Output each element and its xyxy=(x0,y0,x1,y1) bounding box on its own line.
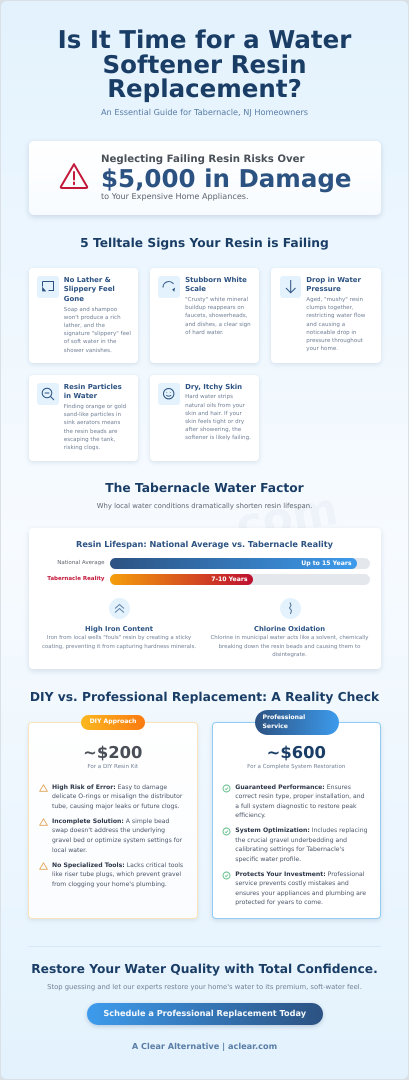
button: schedule xyxy=(87,1003,322,1024)
title: Is It Time for a Water xyxy=(58,25,351,54)
sign text: Pressure xyxy=(306,285,341,293)
sign text: noticeable drop in xyxy=(306,330,356,336)
icon: refresh arc xyxy=(158,276,180,298)
sign text: No Lather & xyxy=(64,276,111,284)
DIY price note: For a DIY Resin Kit xyxy=(87,764,138,770)
chlorine heading: Chlorine Oxidation xyxy=(254,625,325,633)
icon: magnifier xyxy=(37,383,58,404)
sign text: Dry, Itchy Skin xyxy=(185,383,242,391)
panel: sign 2 xyxy=(150,268,259,363)
iron text: Iron from local wells "fouls" resin by creating a sticky xyxy=(47,635,191,641)
iron text xyxy=(42,634,196,650)
sign text xyxy=(306,276,365,352)
pro benefit 2: specific water profile. xyxy=(235,856,301,863)
badge: DIY approach xyxy=(81,715,145,730)
pro benefit 1 xyxy=(222,784,365,819)
sign text: faucets, showerheads, xyxy=(185,313,247,319)
sign text: shower vanishes. xyxy=(64,348,112,354)
heading: signs: 5 Telltale Signs Your Resin is Failing xyxy=(80,236,329,250)
alert note: to Your Expensive Home Appliances. xyxy=(101,191,249,201)
footer heading: Restore Your Water Quality with Total Confidence. xyxy=(31,962,378,976)
icon: chlorine bolt xyxy=(280,598,301,619)
iron heading: High Iron Content xyxy=(85,625,153,633)
panel: professional xyxy=(212,722,381,919)
sign text: pressure throughout xyxy=(306,338,363,344)
panel: sign 1 xyxy=(28,268,138,363)
DIY risk 3: No Specialized Tools: Lacks critical tools xyxy=(52,862,183,869)
DIY risk 2 xyxy=(39,818,182,854)
factor: iron xyxy=(42,598,196,650)
pro benefit 1: efficiency. xyxy=(235,812,266,819)
iron text: coating, preventing it from capturing hardness minerals. xyxy=(42,644,196,650)
sign text: Hard water strips xyxy=(185,394,233,400)
panel: sign 3 xyxy=(271,268,380,363)
sign text xyxy=(64,383,126,451)
pro benefit 3: ensures your appliances and plumbing are xyxy=(235,890,366,897)
sign text xyxy=(185,383,251,441)
bar chart: lifespan xyxy=(47,558,370,585)
divider xyxy=(28,946,381,947)
title xyxy=(58,25,352,103)
sign text: skin feels tight or dry xyxy=(185,419,244,425)
panel: DIY xyxy=(28,722,198,919)
DIY risk 1 xyxy=(39,784,182,810)
pro benefit 3: protected for years to come. xyxy=(235,899,323,906)
DIY risk 3: from clogging your home's plumbing. xyxy=(52,881,167,888)
DIY risk 1: delicate O-rings or misalign the distributor xyxy=(52,793,182,800)
pro benefit 2: calibrating settings for Tabernacle's xyxy=(235,846,344,853)
footer brand: A Clear Alternative | aclear.com xyxy=(132,1041,277,1051)
DIY risk 3: like riser tube plugs, which prevent gravel xyxy=(52,871,181,878)
label: national average: National Average xyxy=(57,560,104,566)
sign text: skin and hair. If your xyxy=(185,411,242,417)
DIY risk 2: swap doesn't address the underlying xyxy=(52,827,165,834)
sign text: sink aerators means xyxy=(64,420,120,426)
label: tabernacle reality: Tabernacle Reality xyxy=(47,576,104,582)
sign text: of hard water. xyxy=(185,330,224,336)
pro benefit 2: System Optimization: Includes replacing xyxy=(235,827,368,834)
pro benefit 2: the crucial gravel underbedding and xyxy=(235,837,347,844)
chlorine text: disintegrate. xyxy=(272,652,307,658)
title: Replacement? xyxy=(107,74,302,103)
sign text: won't produce a rich xyxy=(64,315,121,321)
chlorine text: Chlorine in municipal water acts like a solvent, chemically xyxy=(210,635,369,641)
bar: tabernacle reality: 7-10 Years xyxy=(211,576,248,583)
pro benefit 1: correct resin type, proper installation, and xyxy=(235,793,365,800)
chlorine text: breaking down the resin beads and causing them to xyxy=(219,644,360,650)
sign text: Drop in Water xyxy=(306,276,361,284)
icon: warning triangle xyxy=(60,163,88,189)
DIY risk 1: High Risk of Error: Easy to damage xyxy=(52,784,167,791)
chart title: Resin Lifespan: National Average vs. Tabernacle Reality xyxy=(76,539,333,549)
title: Softener Resin xyxy=(102,50,307,79)
panel: water factor xyxy=(28,528,380,669)
sign text: Soap and shampoo xyxy=(64,307,117,313)
pro benefit 3 xyxy=(222,871,366,906)
sign text: Aged, "mushy" resin xyxy=(306,297,363,303)
pro benefit 3: Protects Your Investment: Professional xyxy=(235,871,364,878)
subtitle: An Essential Guide for Tabernacle, NJ Homeowners xyxy=(101,107,308,117)
panel: sign 5 xyxy=(150,375,259,460)
heading: comparison: DIY vs. Professional Replacement: A Reality Check xyxy=(30,690,379,704)
alert lead text: Neglecting Failing Resin Risks Over xyxy=(101,154,305,165)
DIY risk 2: local water. xyxy=(52,847,87,854)
sign text: your home. xyxy=(306,346,338,352)
DIY risk 3 xyxy=(39,862,183,888)
sign text: sand-like particles in xyxy=(64,412,121,418)
icon: shower xyxy=(37,276,58,298)
panel: sign 4 xyxy=(28,375,138,460)
sign text: Gone xyxy=(64,295,84,303)
badge: professional service: Service xyxy=(262,723,288,730)
sign text: and causing a xyxy=(306,322,345,328)
badge: professional service xyxy=(254,710,338,734)
chlorine text xyxy=(210,634,369,658)
bar: national average xyxy=(110,558,370,568)
sign text: Scale xyxy=(185,285,206,293)
DIY risk 2: Incomplete Solution: A simple bead xyxy=(52,818,169,825)
bar: national average: Up to 15 Years xyxy=(301,560,352,567)
factor: chlorine xyxy=(210,598,369,658)
icon: iron chevrons xyxy=(109,598,130,619)
heading: water factor: The Tabernacle Water Factor xyxy=(105,481,304,495)
DIY risk 1: tube, causing major leaks or future clogs. xyxy=(52,803,179,810)
footer text: Stop guessing and let our experts restore your home's water to its premium, soft-water feel. xyxy=(47,983,362,991)
sign text: Stubborn White xyxy=(185,276,247,284)
subheading: water factor: Why local water conditions dramatically shorten resin lifespan. xyxy=(97,502,312,510)
pro benefit 1: a full system diagnostic to restore peak xyxy=(235,803,357,810)
pro benefit 2 xyxy=(222,827,368,863)
alert headline: $5,000 in Damage xyxy=(101,164,352,193)
sign text: Finding orange or gold xyxy=(64,404,126,410)
icon: down arrow xyxy=(280,276,301,298)
sign text: restricting water flow xyxy=(306,313,365,319)
sign text: softener is likely failing. xyxy=(185,435,251,441)
sign text: escaping the tank, xyxy=(64,437,115,443)
sign text: risking clogs. xyxy=(64,445,100,451)
sign text: and dishes, a clear sign xyxy=(185,322,251,328)
sign text: natural oils from your xyxy=(185,403,245,409)
sign text xyxy=(185,276,251,336)
panel: damage alert xyxy=(28,140,380,214)
DIY risk 2: gravel bed or optimize system settings for xyxy=(52,837,182,844)
sign text: the resin beads are xyxy=(64,429,117,435)
pro benefit 1: Guaranteed Performance: Ensures xyxy=(235,784,351,791)
button: schedule: Schedule a Professional Replacement Today xyxy=(103,1008,306,1018)
sign text: after showering, the xyxy=(185,427,241,433)
sign text: clumps together, xyxy=(306,305,354,311)
sign text: Slippery Feel xyxy=(64,285,115,293)
sign text: in Water xyxy=(64,392,97,400)
sign text: signature "slippery" feel xyxy=(64,331,131,337)
pro price note: For a Complete System Restoration xyxy=(247,764,345,770)
pro price: ~$600 xyxy=(267,742,326,762)
icon: face xyxy=(158,383,180,404)
watermark: com xyxy=(232,484,342,551)
badge: professional service: Professional xyxy=(262,714,305,721)
bar: tabernacle reality xyxy=(110,574,370,584)
sign text: buildup reappears on xyxy=(185,305,244,311)
sign text: Resin Particles xyxy=(64,383,122,391)
sign text: of soft water in the xyxy=(64,339,116,345)
pro benefit 3: service prevents costly mistakes and xyxy=(235,880,349,887)
sign text: lather, and the xyxy=(64,323,105,329)
badge: DIY approach: DIY Approach xyxy=(90,718,136,725)
sign text: "Crusty" white mineral xyxy=(185,297,248,303)
DIY price: ~$200 xyxy=(83,742,142,762)
sign text xyxy=(64,276,131,354)
